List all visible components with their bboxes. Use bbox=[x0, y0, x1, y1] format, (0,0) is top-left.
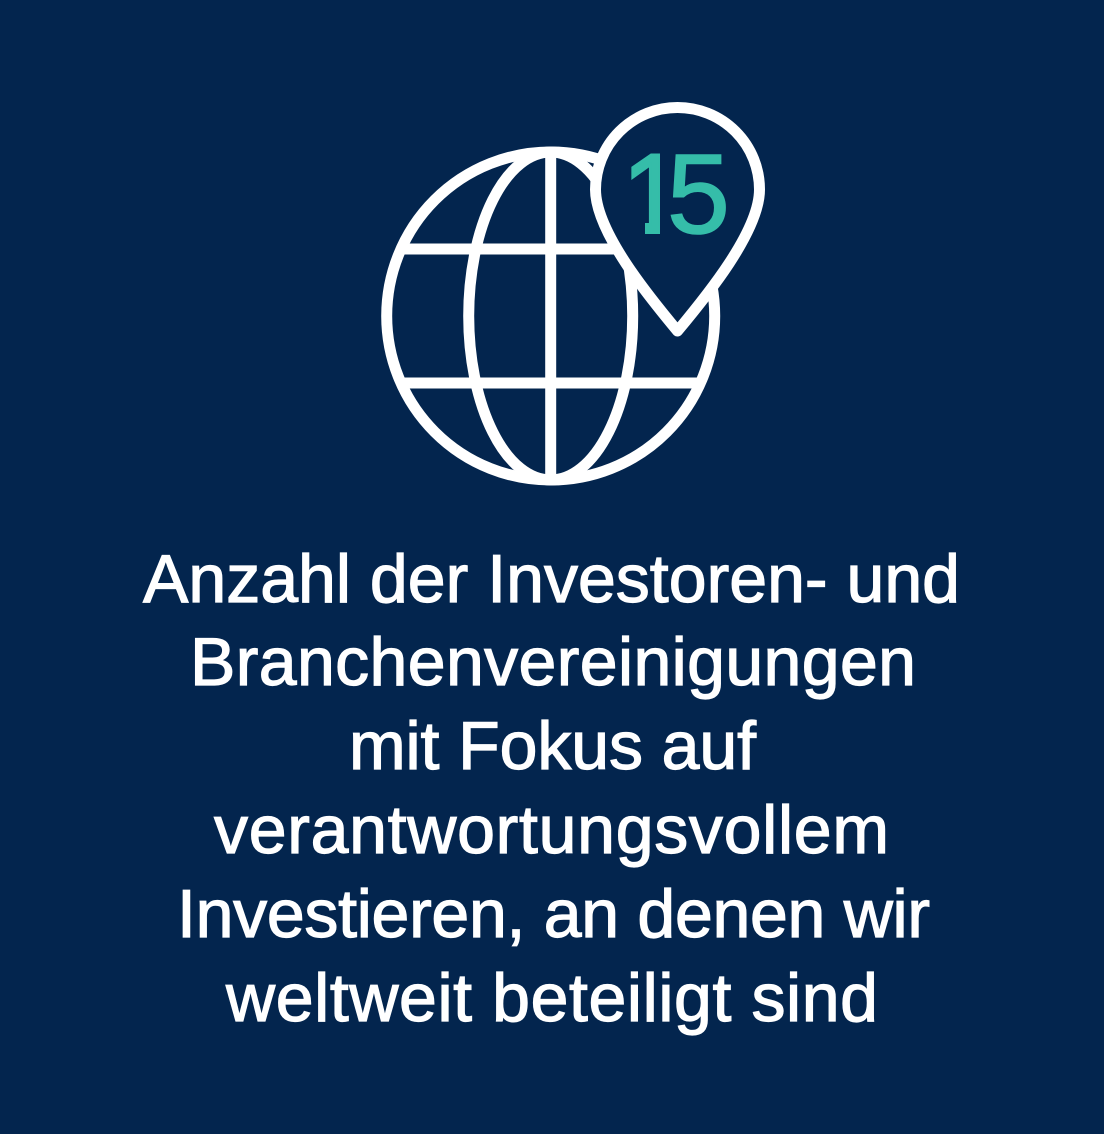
icon: globe bbox=[387, 152, 715, 480]
description text: Anzahl der Investoren- und bbox=[143, 541, 960, 617]
description text: Branchenvereinigungen bbox=[190, 624, 916, 700]
icon: globe with location pin bbox=[387, 107, 760, 480]
description text: weltweit beteiligt sind bbox=[225, 960, 878, 1036]
description text: Investieren, an denen wir bbox=[177, 876, 930, 952]
description text bbox=[143, 541, 960, 1036]
pin number bbox=[631, 154, 726, 235]
pin number: 5 bbox=[667, 131, 730, 257]
pin number: 1 bbox=[622, 131, 685, 257]
icon: location pin bbox=[596, 107, 760, 331]
description text: mit Fokus auf bbox=[349, 708, 756, 784]
description text: verantwortungsvollem bbox=[214, 792, 889, 868]
